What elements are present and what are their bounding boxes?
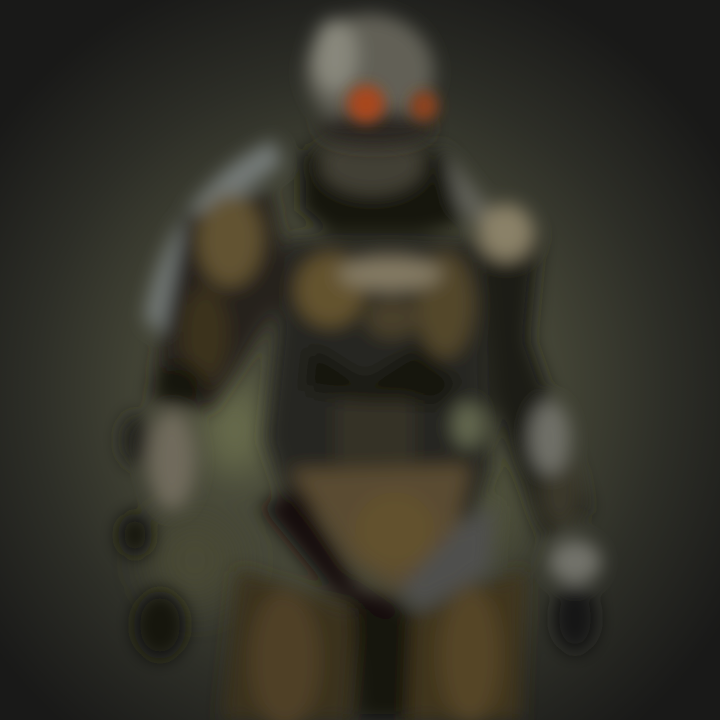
legs [222,570,355,720]
forearms and gauntlets [148,410,196,510]
arms [150,190,290,410]
chest plates [296,254,364,326]
glow behind figure [150,384,518,605]
helmet [306,14,434,146]
orange eyes [347,85,438,123]
abdomen [305,345,460,405]
figure [118,14,601,720]
figure body, blended [118,135,601,720]
neck and beard [300,150,462,235]
hip armor [290,465,470,590]
shoulder highlight [145,140,282,335]
torso [265,240,490,520]
